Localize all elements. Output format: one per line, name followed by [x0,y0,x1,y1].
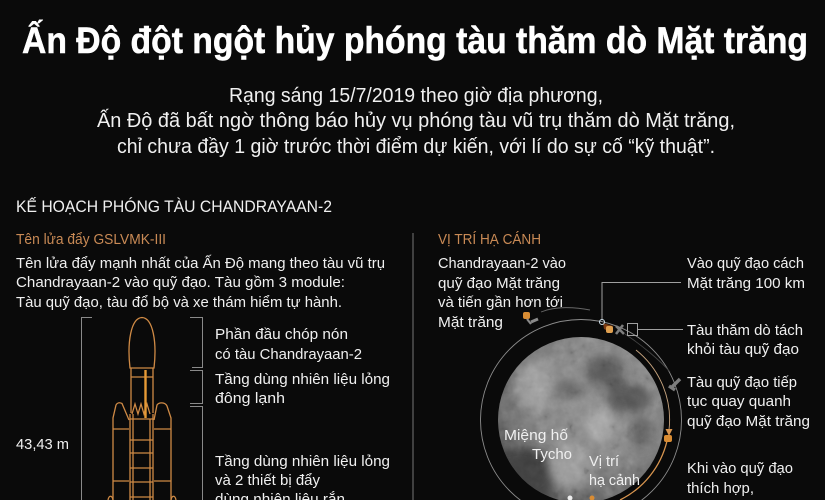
label: landing site: Vị trí [589,453,620,470]
text: separation: khỏi tàu quỹ đạo [687,341,799,358]
callout lines [600,282,683,336]
moon [484,337,664,500]
panel: landing site [438,231,810,500]
rocket description: Tàu quỹ đạo, tàu đổ bộ và xe thám hiểm tự hành. [16,294,342,311]
text: approach: Chandrayaan-2 vào [438,255,566,272]
label: liquid stage and boosters: Tầng dùng nhiên liệu lỏng [215,453,390,470]
orbit rings [480,308,682,500]
text: separation: Tàu thăm dò tách [687,322,803,339]
text: orbiter continues [687,374,810,430]
text: orbit 100 km [687,255,805,292]
label: nose cone [215,326,362,363]
landing markers [568,496,594,500]
spacecraft: approaching [523,312,538,324]
intro text: Ấn Độ đã bất ngờ thông báo hủy vụ phóng tàu vũ trụ thăm dò Mặt trăng, [97,109,735,132]
intro text [97,85,735,158]
label: liquid stage and boosters [215,453,390,500]
panel: rocket [16,231,390,500]
rocket illustration [108,318,176,500]
text: proper orbit: thích hợp, [687,480,754,497]
text: orbit 100 km: Vào quỹ đạo cách [687,255,804,272]
label: landing site [589,453,640,489]
label: Tycho crater: Miệng hố [504,427,569,444]
landing subheading: VỊ TRÍ HẠ CÁNH [438,231,541,248]
height bracket [82,318,92,500]
spacecraft: separation [603,323,624,334]
spacecraft: orbiter [669,379,680,390]
column divider [412,233,414,500]
label: cryogenic stage: đông lạnh [215,390,285,407]
label: Tycho crater [504,427,572,463]
label: landing site: hạ cảnh [589,472,640,489]
rocket description: Tên lửa đẩy mạnh nhất của Ấn Độ mang theo tàu vũ trụ [16,255,385,272]
label: cryogenic stage: Tầng dùng nhiên liệu lỏng [215,371,390,388]
text: approach [438,255,566,331]
text: orbiter continues: tục quay quanh [687,393,791,410]
text: proper orbit: Khi vào quỹ đạo [687,460,793,477]
text: approach: quỹ đạo Mặt trăng [438,275,560,292]
text: separation [687,322,803,358]
rocket subheading: Tên lửa đẩy GSLVMK-III [16,231,166,248]
text: orbiter continues: quỹ đạo Mặt trăng [687,413,810,430]
rocket description: Chandrayaan-2 vào quỹ đạo. Tàu gồm 3 module: [16,274,345,291]
text: approach: và tiến gần hơn tới [438,294,563,311]
height label: 43,43 m [16,436,69,453]
label: liquid stage and boosters: và 2 thiết bị đẩy [215,472,320,489]
label: Tycho crater: Tycho [532,446,572,463]
intro text: chỉ chưa đầy 1 giờ trước thời điểm dự kiến, với lí do sự cố “kỹ thuật”. [117,136,715,158]
label: cryogenic stage [215,371,390,407]
section heading: KẾ HOẠCH PHÓNG TÀU CHANDRAYAAN-2 [16,197,332,216]
stage brackets [190,318,202,500]
text: orbit 100 km: Mặt trăng 100 km [687,275,805,292]
text: orbiter continues: Tàu quỹ đạo tiếp [687,374,797,391]
text: proper orbit [687,460,793,497]
label: nose cone: Phần đầu chóp nón [215,326,348,343]
text: approach: Mặt trăng [438,314,503,331]
spacecraft: lander [664,435,672,442]
label: nose cone: có tàu Chandrayaan-2 [215,346,362,363]
rocket description [16,255,385,311]
intro text: Rạng sáng 15/7/2019 theo giờ địa phương, [229,85,603,107]
